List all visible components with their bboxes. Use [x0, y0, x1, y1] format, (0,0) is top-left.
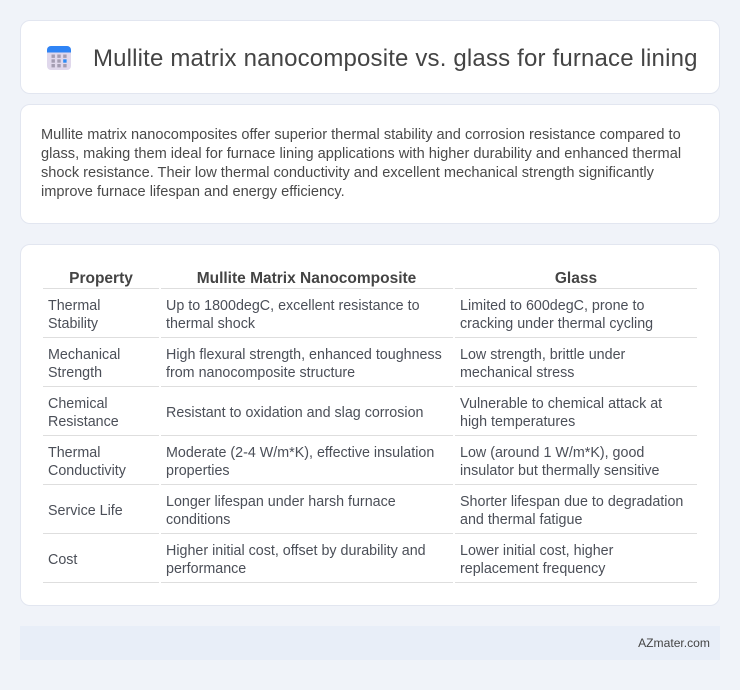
row: thermal stability: Up to 1800degC, excellent resistance to	[166, 298, 420, 314]
row: service life: Longer lifespan under harsh furnace	[166, 494, 396, 510]
table header: glass: Glass	[555, 270, 597, 287]
summary text: Mullite matrix nanocomposites offer superior thermal stability and corrosion resistance compared to	[41, 127, 681, 143]
row: thermal conductivity: Low (around 1 W/m*K), good	[460, 445, 644, 461]
row: thermal stability: thermal shock	[166, 316, 255, 332]
row: thermal conductivity: Moderate (2-4 W/m*K), effective insulation	[166, 445, 434, 461]
row: chemical resistance	[48, 396, 662, 430]
table header: mullite matrix nanocomposite: Mullite Matrix Nanocomposite	[197, 270, 416, 287]
table header: property: Property	[69, 270, 133, 287]
row: thermal stability	[48, 298, 653, 332]
header card	[20, 20, 720, 94]
row: thermal conductivity	[48, 445, 659, 479]
row: cost: performance	[166, 561, 246, 577]
panel: summary	[20, 104, 720, 224]
summary text: glass, making them ideal for furnace lining applications with higher durability and enhanced thermal	[41, 146, 681, 162]
row: cost: replacement frequency	[460, 561, 605, 577]
summary text: improve furnace lifespan and energy efficiency.	[41, 184, 345, 200]
row: chemical resistance: high temperatures	[460, 414, 575, 430]
row: thermal stability: cracking under thermal cycling	[460, 316, 653, 332]
icon: calendar	[47, 46, 71, 70]
row: chemical resistance: Resistant to oxidation and slag corrosion	[166, 405, 424, 421]
row: mechanical strength: Mechanical	[48, 347, 120, 363]
row: cost	[48, 543, 614, 577]
row: mechanical strength: mechanical stress	[460, 365, 574, 381]
row: mechanical strength: Low strength, brittle under	[460, 347, 625, 363]
row: mechanical strength: High flexural strength, enhanced toughness	[166, 347, 442, 363]
row: service life: and thermal fatigue	[460, 512, 582, 528]
row: service life: conditions	[166, 512, 230, 528]
row: mechanical strength: from nanocomposite structure	[166, 365, 355, 381]
panel: comparison table	[20, 244, 720, 606]
row: thermal stability: Stability	[48, 316, 98, 332]
summary text	[41, 127, 681, 200]
row: thermal stability: Limited to 600degC, prone to	[460, 298, 644, 314]
row: thermal conductivity: insulator but thermally sensitive	[460, 463, 659, 479]
title: Mullite matrix nanocomposite vs. glass for furnace lining	[93, 45, 698, 72]
row: chemical resistance: Resistance	[48, 414, 119, 430]
row: thermal conductivity: Conductivity	[48, 463, 126, 479]
row: cost: Cost	[48, 552, 77, 568]
summary text: shock resistance. Their low thermal conductivity and excellent mechanical strength significantly	[41, 165, 654, 181]
row: service life	[48, 494, 683, 528]
row: mechanical strength	[48, 347, 626, 381]
row: cost: Lower initial cost, higher	[460, 543, 613, 559]
row: service life: Service Life	[48, 503, 123, 519]
row: cost: Higher initial cost, offset by durability and	[166, 543, 426, 559]
footer text: AZmater.com: AZmater.com	[638, 636, 710, 650]
row: chemical resistance: Vulnerable to chemical attack at	[460, 396, 662, 412]
footer bar	[20, 626, 720, 660]
row: mechanical strength: Strength	[48, 365, 102, 381]
row: service life: Shorter lifespan due to degradation	[460, 494, 683, 510]
row: thermal conductivity: Thermal	[48, 445, 100, 461]
row: thermal conductivity: properties	[166, 463, 230, 479]
row: thermal stability: Thermal	[48, 298, 100, 314]
row: chemical resistance: Chemical	[48, 396, 108, 412]
